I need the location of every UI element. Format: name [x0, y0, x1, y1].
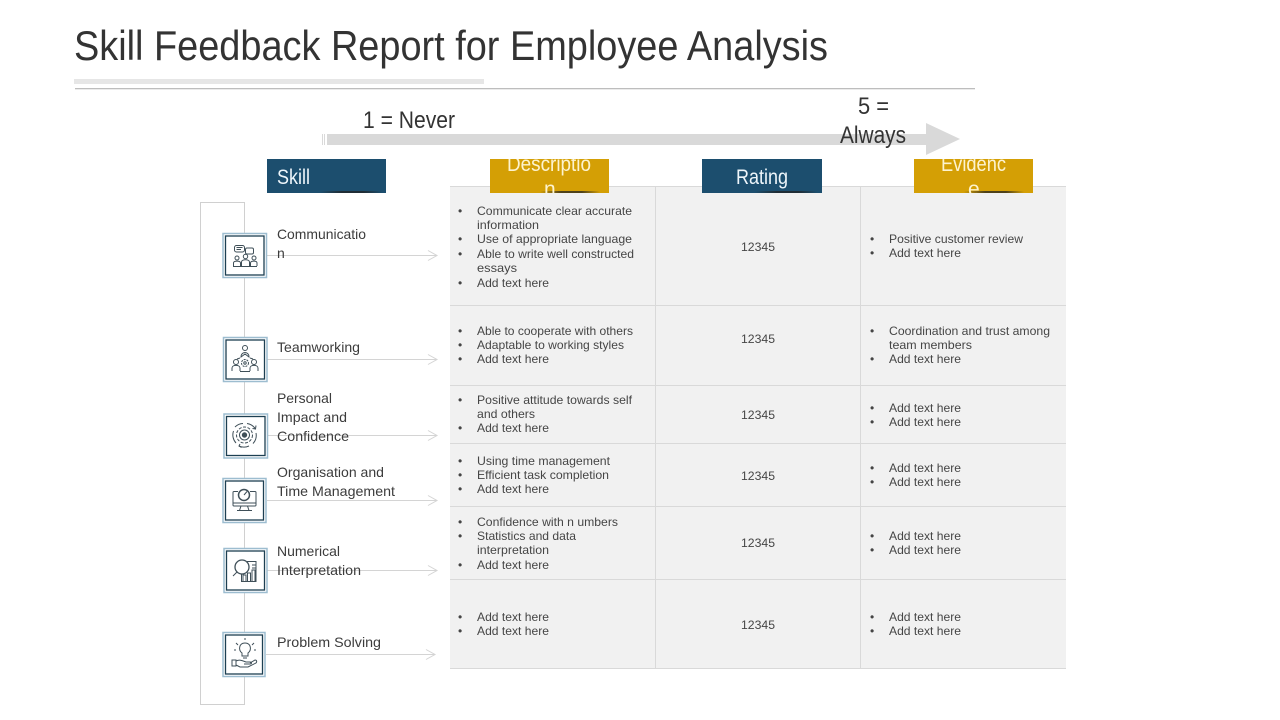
column: evidence: Add text here [889, 529, 961, 543]
column: evidence: • [870, 352, 874, 366]
column: description: • [458, 352, 462, 366]
column: evidence: • [870, 324, 874, 338]
skill: personal impact and confidence: Impact and [277, 409, 347, 425]
scale arrow [322, 123, 960, 155]
column: description: Using time management [477, 454, 611, 468]
column: description: • [458, 558, 462, 572]
column: rating: 12345 [741, 618, 775, 632]
column: evidence: Add text here [889, 543, 961, 557]
icon: communication [223, 234, 266, 278]
column: rating [741, 240, 775, 632]
header: skill: Skill [277, 166, 310, 189]
skill: organisation and time management: Organisation and [277, 464, 384, 480]
column: rating: 12345 [741, 240, 775, 254]
column: description: Confidence with n umbers [477, 515, 618, 529]
column: rating: 12345 [741, 408, 775, 422]
icon: target [224, 414, 268, 458]
column: description: information [477, 218, 539, 232]
column: description: Add text here [477, 624, 549, 638]
header: rating: Rating [736, 166, 788, 189]
skill: teamworking [224, 338, 360, 382]
skill: organisation and time management: Time Management [277, 483, 395, 499]
column: evidence: • [870, 624, 874, 638]
column: description: • [458, 276, 462, 290]
column: evidence: Add text here [889, 401, 961, 415]
column: description: essays [477, 261, 517, 275]
column: evidence: Add text here [889, 624, 961, 638]
column: description: • [458, 232, 462, 246]
skill: personal impact and confidence: Personal [277, 390, 332, 406]
column: description: • [458, 393, 462, 407]
scale label: always [840, 93, 906, 149]
column: evidence: Add text here [889, 475, 961, 489]
column: evidence: • [870, 461, 874, 475]
header: evidence: Evidenc [941, 153, 1006, 176]
skill: communication [223, 226, 366, 278]
header: description: Descriptio [507, 153, 591, 176]
column: evidence: Add text here [889, 352, 961, 366]
column: description: • [458, 338, 462, 352]
header: rating [702, 159, 822, 193]
title: Skill Feedback Report for Employee Analysis [74, 22, 828, 69]
column: description: • [458, 421, 462, 435]
header: evidence [914, 159, 1033, 193]
column: description: Statistics and data [477, 529, 576, 543]
skill: numerical interpretation: Numerical [277, 543, 340, 559]
column: evidence: Positive customer review [889, 232, 1023, 246]
skill: personal impact and confidence: Confidence [277, 428, 349, 444]
column: description: • [458, 482, 462, 496]
column: description: • [458, 454, 462, 468]
scale label: always: Always [840, 122, 906, 149]
icon: monitor clock [223, 478, 266, 522]
column: description: • [458, 247, 462, 261]
column: description: Add text here [477, 421, 549, 435]
title [74, 22, 975, 89]
column: rating: 12345 [741, 469, 775, 483]
column: evidence: Add text here [889, 415, 961, 429]
column: evidence: team members [889, 338, 972, 352]
column: description: Add text here [477, 276, 549, 290]
skill: teamworking: Teamworking [277, 339, 360, 355]
column: description: • [458, 624, 462, 638]
column: description: • [458, 468, 462, 482]
column: evidence: Add text here [889, 461, 961, 475]
column: description: Efficient task completion [477, 468, 609, 482]
column: evidence: • [870, 543, 874, 557]
column: description: • [458, 529, 462, 543]
column: evidence: • [870, 415, 874, 429]
column: description: Add text here [477, 610, 549, 624]
header: skill [267, 159, 386, 193]
column: description: Positive attitude towards self [477, 393, 633, 407]
column: description: • [458, 324, 462, 338]
column: rating: 12345 [741, 536, 775, 550]
column: description: Add text here [477, 482, 549, 496]
icon: teamwork [224, 338, 267, 382]
column: description: Communicate clear accurate [477, 204, 632, 218]
column: evidence: • [870, 610, 874, 624]
column: description: • [458, 610, 462, 624]
column: description: Use of appropriate language [477, 232, 632, 246]
skill: communication: Communicatio [277, 226, 366, 242]
skill: communication: n [277, 245, 285, 261]
column: rating: 12345 [741, 332, 775, 346]
skill: personal impact and confidence [224, 390, 349, 458]
icon: bulb in hand [223, 632, 265, 676]
connector arrows [266, 250, 437, 660]
column: description: Adaptable to working styles [477, 338, 624, 352]
column: evidence: • [870, 246, 874, 260]
skill: problem solving [223, 632, 381, 676]
skill: organisation and time management [223, 464, 395, 522]
column: description: Add text here [477, 352, 549, 366]
column: evidence [870, 232, 1050, 638]
column: description: Able to write well constructed [477, 247, 634, 261]
column: description: Add text here [477, 558, 549, 572]
header: description [490, 159, 609, 193]
column: evidence: • [870, 475, 874, 489]
scale label: never: 1 = Never [363, 107, 455, 134]
column: description: and others [477, 407, 535, 421]
column: description: Able to cooperate with others [477, 324, 633, 338]
header: evidence: e [968, 178, 980, 201]
column: description: • [458, 515, 462, 529]
column: description [458, 204, 634, 638]
column: description: interpretation [477, 543, 549, 557]
skill: numerical interpretation [224, 543, 361, 592]
column: evidence: Add text here [889, 246, 961, 260]
column: evidence: • [870, 401, 874, 415]
column: description: • [458, 204, 462, 218]
column: evidence: • [870, 529, 874, 543]
timeline bracket [200, 202, 244, 704]
column: evidence: Add text here [889, 610, 961, 624]
scale label: always: 5 = [858, 93, 889, 120]
column: evidence: Coordination and trust among [889, 324, 1050, 338]
icon: magnifier chart [224, 548, 267, 592]
skill: problem solving: Problem Solving [277, 634, 381, 650]
header: description: n [544, 178, 556, 201]
skill: numerical interpretation: Interpretation [277, 562, 361, 578]
column: evidence: • [870, 232, 874, 246]
table [450, 186, 1066, 669]
